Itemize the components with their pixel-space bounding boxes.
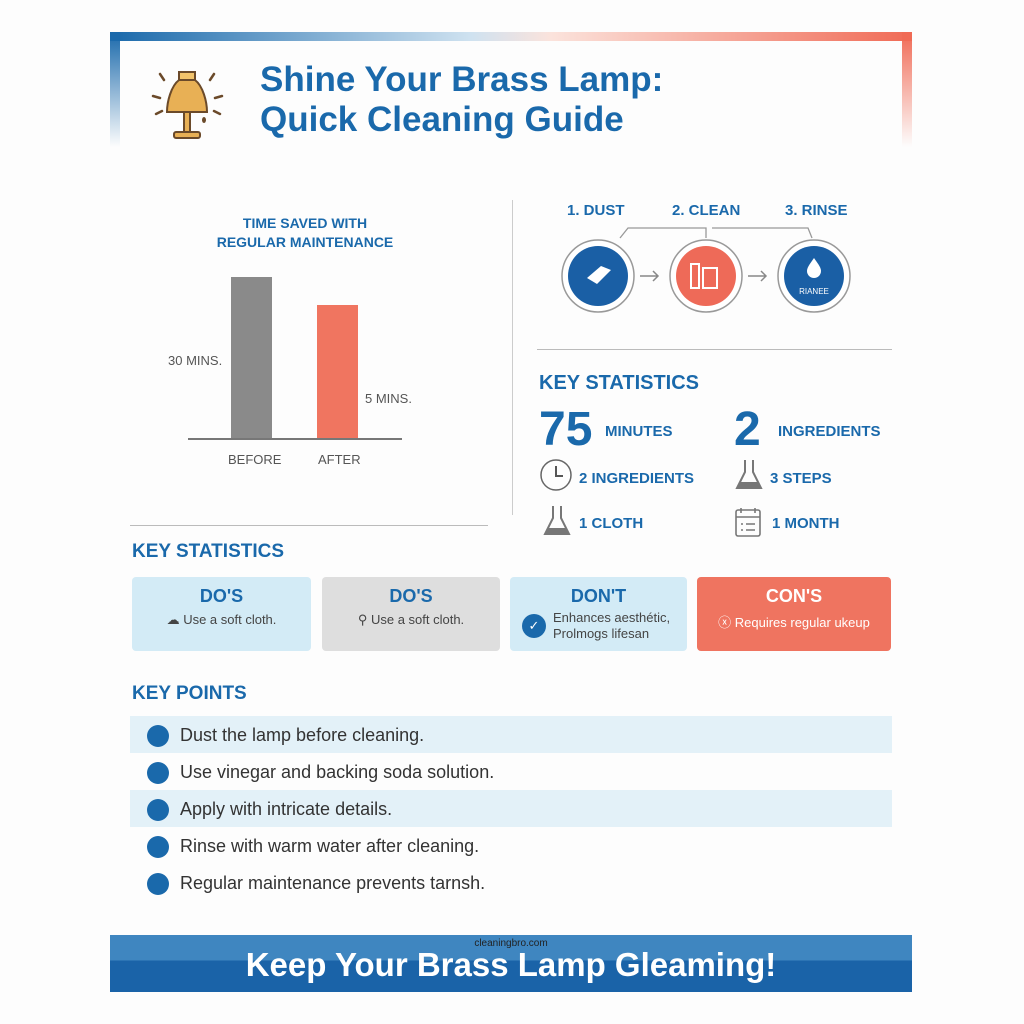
chart title <box>217 215 393 250</box>
header frame <box>110 32 912 143</box>
footer banner: Keep Your Brass Lamp Gleaming! <box>246 946 776 983</box>
chart: time saved: BEFORE <box>228 452 281 467</box>
process steps: 3. RINSE <box>785 202 848 219</box>
card: do's 1: ☁ Use a soft cloth. <box>167 612 276 627</box>
chart: time saved: 30 MINS. <box>168 353 222 368</box>
card: do's 2: DO'S <box>389 586 433 606</box>
card: don't: ✓ <box>529 618 539 633</box>
chart: time saved: 5 MINS. <box>365 391 412 406</box>
card: do's 1 <box>132 577 311 651</box>
title <box>260 60 663 139</box>
key statistics right: 1 MONTH <box>772 515 840 532</box>
key points list: Regular maintenance prevents tarnsh. <box>180 873 485 893</box>
title: Quick Cleaning Guide <box>260 100 624 139</box>
key points list: Use vinegar and backing soda solution. <box>180 762 494 782</box>
key statistics right: INGREDIENTS <box>778 423 881 440</box>
key statistics right: 2 <box>734 403 761 456</box>
key points list: Dust the lamp before cleaning. <box>180 725 424 745</box>
key statistics right: 3 STEPS <box>770 470 832 487</box>
heading: key points: KEY POINTS <box>132 683 247 704</box>
key statistics right <box>539 372 881 537</box>
card: don't <box>510 577 687 651</box>
key statistics right: 75 <box>539 403 592 456</box>
chart: time saved <box>168 215 412 467</box>
card: do's 2 <box>322 577 500 651</box>
card: do's 1: DO'S <box>200 586 243 606</box>
card: don't: Prolmogs lifesan <box>553 626 649 641</box>
key statistics right: MINUTES <box>605 423 672 440</box>
card: con's <box>697 577 891 651</box>
key statistics right: KEY STATISTICS <box>539 372 699 394</box>
key statistics right: 1 CLOTH <box>579 515 643 532</box>
chart title: TIME SAVED WITH <box>243 215 367 231</box>
footer banner <box>110 935 912 992</box>
chart: time saved: AFTER <box>318 452 361 467</box>
key points list: Apply with intricate details. <box>180 799 392 819</box>
card: con's: CON'S <box>766 586 822 606</box>
title: Shine Your Brass Lamp: <box>260 60 663 99</box>
card: do's 2: ⚲ Use a soft cloth. <box>358 612 464 627</box>
card: don't: DON'T <box>571 586 626 606</box>
icon: lamp <box>152 71 224 139</box>
key statistics right: 2 INGREDIENTS <box>579 470 694 487</box>
chart title: REGULAR MAINTENANCE <box>217 234 393 250</box>
key points list <box>130 716 892 895</box>
footer banner: cleaningbro.com <box>474 938 548 949</box>
process steps: 2. CLEAN <box>672 202 740 219</box>
process steps: RIANEE <box>799 287 829 296</box>
card: don't: Enhances aesthétic, <box>553 610 670 625</box>
heading: key statistics: KEY STATISTICS <box>132 541 284 562</box>
process steps <box>561 202 851 313</box>
key points list: Rinse with warm water after cleaning. <box>180 836 479 856</box>
card: con's: ⓧ Requires regular ukeup <box>718 615 870 630</box>
process steps: 1. DUST <box>567 202 625 219</box>
